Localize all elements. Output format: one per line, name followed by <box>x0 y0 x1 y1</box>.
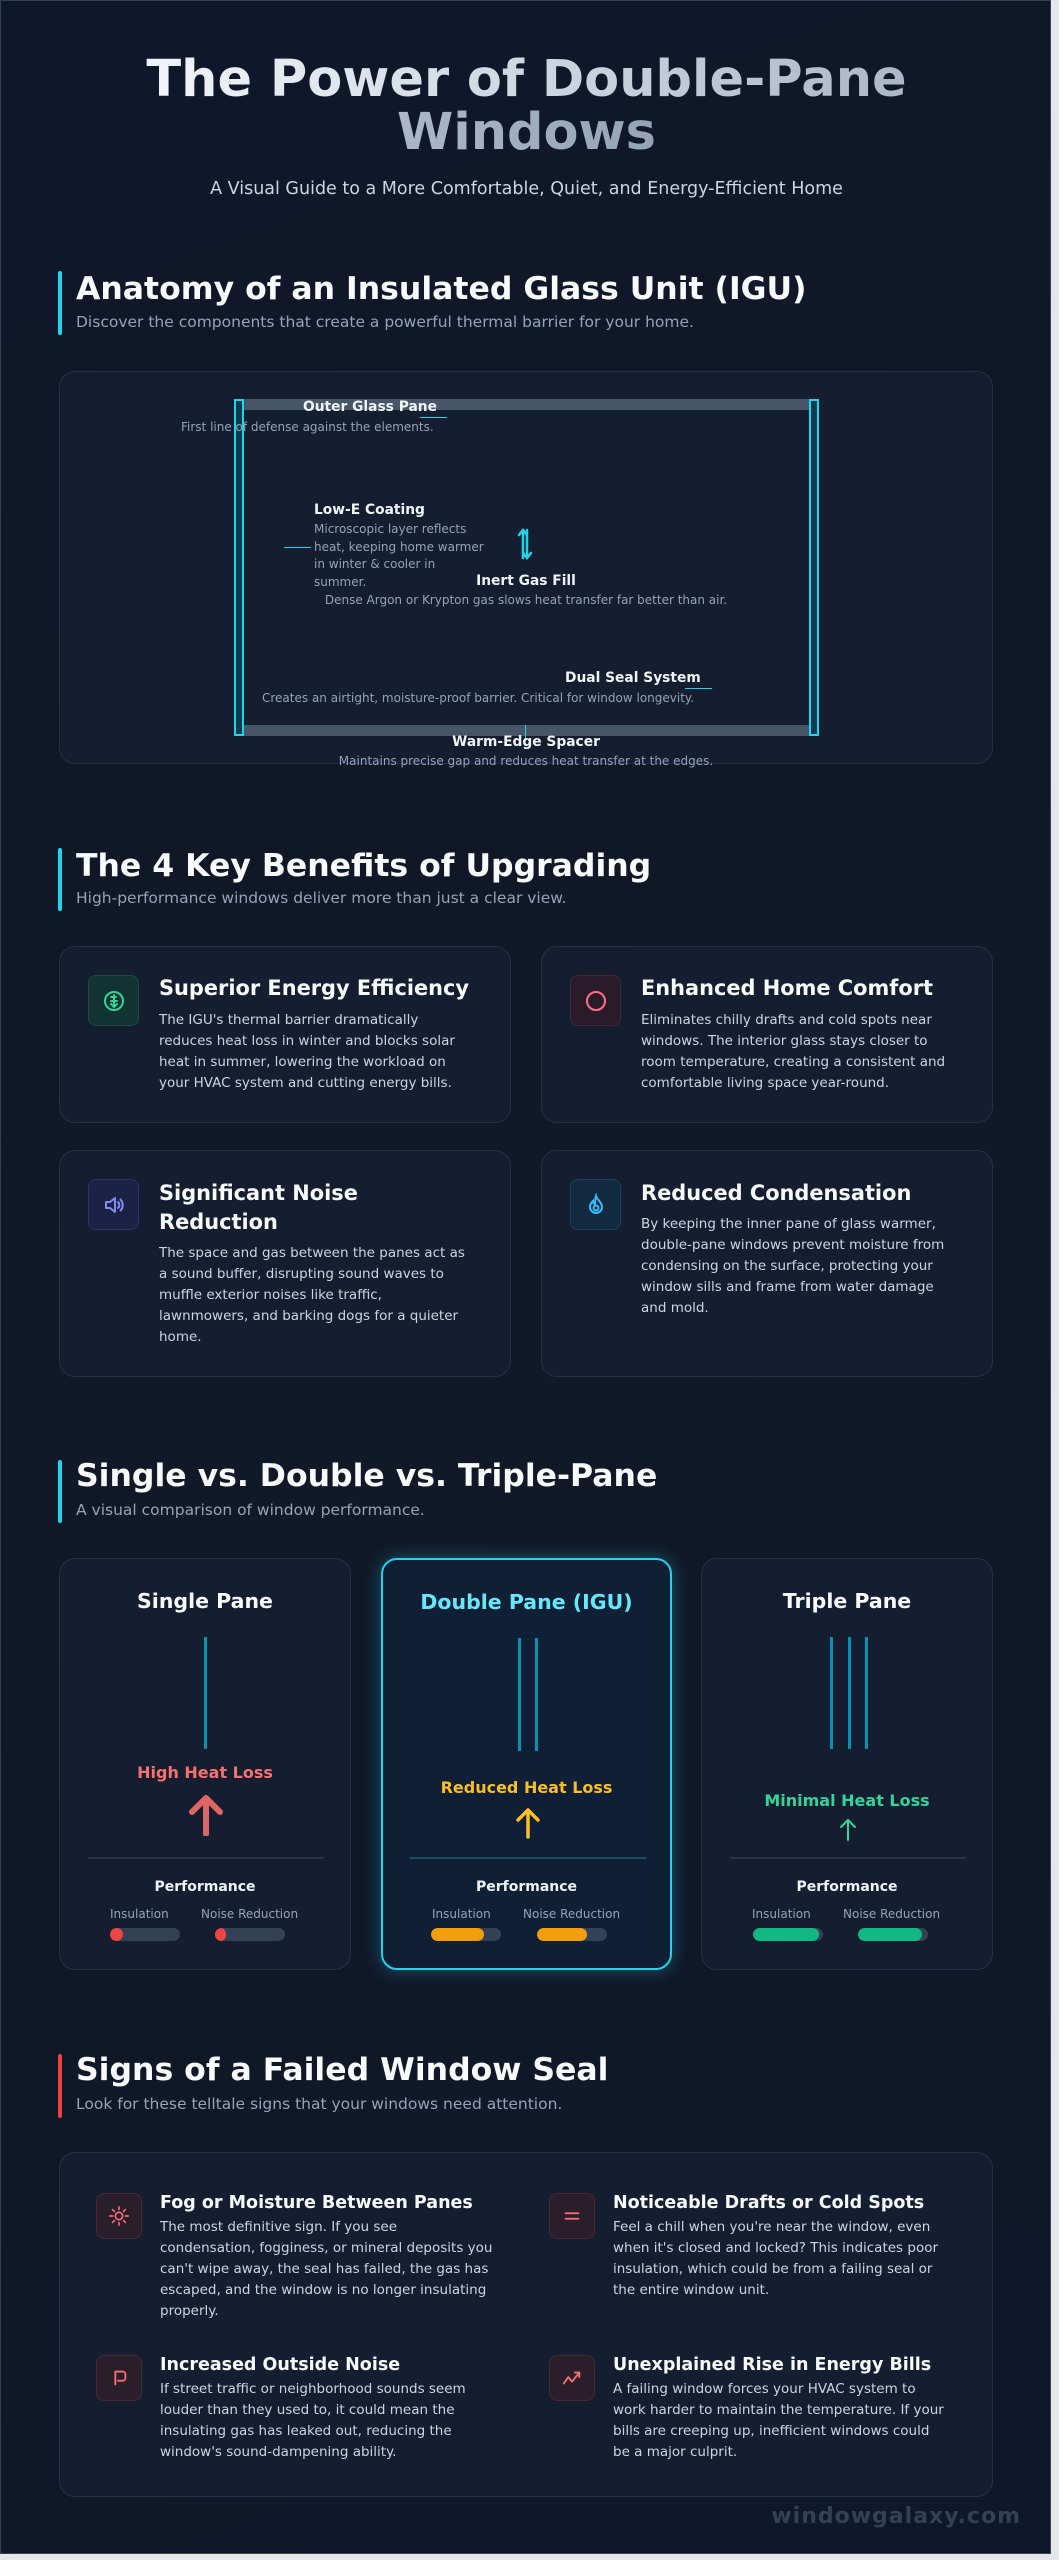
label: inert gas fill: Dense Argon or Krypton gas slows heat transfer far better than air. <box>325 593 727 607</box>
section header: comparison <box>58 1458 657 1523</box>
sign: fog: properly. <box>160 2303 219 2319</box>
card: double pane: Noise Reduction <box>523 1907 620 1921</box>
sign: noise: window's sound-dampening ability. <box>160 2444 396 2460</box>
section header: failed seal <box>58 2052 608 2118</box>
sign: drafts: insulation, which could be from a failing seal or <box>613 2261 932 2277</box>
card: noise reduction <box>59 1150 511 1377</box>
card: home comfort: Enhanced Home Comfort <box>641 976 933 1000</box>
card: home comfort: comfortable living space year-round. <box>641 1075 889 1091</box>
card: double pane: Reduced Heat Loss <box>441 1778 612 1797</box>
card: triple pane: Performance <box>796 1879 898 1895</box>
section header: failed seal: Look for these telltale signs that your windows need attention. <box>76 2095 562 2113</box>
card: noise reduction: home. <box>159 1329 202 1345</box>
label: warm-edge spacer: Warm-Edge Spacer <box>452 734 600 750</box>
card: triple pane <box>701 1558 993 1970</box>
sign: fog <box>96 2193 492 2319</box>
card: noise reduction: muffle exterior noises like traffic, <box>159 1287 382 1303</box>
card: triple pane: Minimal Heat Loss <box>764 1791 930 1810</box>
sign: noise: Increased Outside Noise <box>160 2355 400 2375</box>
panel: signs <box>59 2152 993 2497</box>
card: triple pane: Triple Pane <box>783 1589 911 1613</box>
card: home comfort: Eliminates chilly drafts and cold spots near <box>641 1012 932 1028</box>
section header: anatomy <box>58 271 806 335</box>
card: single pane: High Heat Loss <box>137 1763 273 1782</box>
sign: fog: The most definitive sign. If you see <box>160 2219 397 2235</box>
sign: energy bills: bills are creeping up, inefficient windows could <box>613 2423 929 2439</box>
label: dual seal system: Dual Seal System <box>565 670 701 686</box>
panel: IGU diagram <box>59 371 993 764</box>
section header: benefits: The 4 Key Benefits of Upgrading <box>76 848 651 884</box>
label: low-e coating: summer. <box>314 574 366 588</box>
section header: comparison: A visual comparison of window performance. <box>76 1501 425 1519</box>
label: dual seal system: Creates an airtight, moisture-proof barrier. Critical for window longevity. <box>262 691 694 705</box>
label: low-e coating <box>284 502 484 588</box>
sign: energy bills: work harder to maintain the temperature. If your <box>613 2402 944 2418</box>
sign: energy bills: be a major culprit. <box>613 2444 737 2460</box>
card: energy efficiency: Superior Energy Efficiency <box>159 976 469 1000</box>
sign: energy bills: Unexplained Rise in Energy Bills <box>613 2355 931 2375</box>
section header: comparison: Single vs. Double vs. Triple-Pane <box>76 1458 657 1494</box>
card: noise reduction: The space and gas between the panes act as <box>159 1245 465 1261</box>
sign: energy bills <box>549 2355 944 2460</box>
card: triple pane: Noise Reduction <box>843 1907 940 1921</box>
icon: arrow <box>516 1808 540 1839</box>
label: inert gas fill <box>325 573 727 607</box>
card: triple pane: Insulation <box>752 1907 811 1921</box>
card: energy efficiency: your HVAC system and cutting energy bills. <box>159 1075 452 1091</box>
watermark: windowgalaxy.com <box>771 2504 1021 2529</box>
title <box>146 50 907 162</box>
card: home comfort: room temperature, creating a consistent and <box>641 1054 945 1070</box>
card: condensation: Reduced Condensation <box>641 1181 911 1205</box>
card: energy efficiency <box>59 946 511 1123</box>
title: The Power of Double-Pane <box>146 50 907 109</box>
card: energy efficiency: The IGU's thermal barrier dramatically <box>159 1012 418 1028</box>
sign: drafts: when it's closed and locked? This indicates poor <box>613 2240 938 2256</box>
card: condensation: and mold. <box>641 1300 709 1316</box>
section header: anatomy: Discover the components that create a powerful thermal barrier for your home. <box>76 313 694 331</box>
card: home comfort <box>541 946 993 1123</box>
sign: fog: can't wipe away, the seal has failed, the gas has <box>160 2261 488 2277</box>
label: low-e coating: Low-E Coating <box>314 502 425 518</box>
label: outer glass pane: First line of defense against the elements. <box>181 420 434 434</box>
card: noise reduction: Reduction <box>159 1210 278 1234</box>
card: single pane: Noise Reduction <box>201 1907 298 1921</box>
sign: fog: escaped, and the window is no longer insulating <box>160 2282 486 2298</box>
card: single pane <box>59 1558 351 1970</box>
sign: noise <box>96 2355 466 2460</box>
card: double pane: Insulation <box>432 1907 491 1921</box>
label: low-e coating: heat, keeping home warmer <box>314 540 484 554</box>
icon: gas arrows <box>518 528 532 560</box>
sign: energy bills: A failing window forces your HVAC system to <box>613 2381 916 2397</box>
icon: speaker <box>88 1179 139 1230</box>
subtitle: A Visual Guide to a More Comfortable, Quiet, and Energy-Efficient Home <box>210 179 843 199</box>
card: noise reduction: lawnmowers, and barking dogs for a quieter <box>159 1308 458 1324</box>
sign: noise: If street traffic or neighborhood sounds seem <box>160 2381 466 2397</box>
label: low-e coating: in winter & cooler in <box>314 557 435 571</box>
sign: fog: condensation, fogginess, or mineral deposits you <box>160 2240 492 2256</box>
section header: benefits <box>58 848 651 911</box>
label: dual seal system <box>262 670 712 705</box>
section header: failed seal: Signs of a Failed Window Seal <box>76 2052 608 2088</box>
icon: leaf coin <box>88 975 139 1026</box>
label: outer glass pane: Outer Glass Pane <box>303 399 437 415</box>
card: condensation: double-pane windows prevent moisture from <box>641 1237 944 1253</box>
card: single pane: Performance <box>154 1879 256 1895</box>
icon: ring <box>570 975 621 1026</box>
sign: noise: louder than they used to, it could mean the <box>160 2402 454 2418</box>
section header: benefits: High-performance windows deliver more than just a clear view. <box>76 889 566 907</box>
panes <box>518 1638 521 1751</box>
icon: small arrow <box>840 1818 856 1841</box>
label: inert gas fill: Inert Gas Fill <box>476 573 576 589</box>
card: energy efficiency: heat in summer, lowering the workload on <box>159 1054 446 1070</box>
sign: noise: insulating gas has leaked out, reducing the <box>160 2423 452 2439</box>
panes <box>830 1637 833 1749</box>
label: warm-edge spacer <box>339 725 713 768</box>
card: noise reduction: Significant Noise <box>159 1181 358 1205</box>
label: low-e coating: Microscopic layer reflects <box>314 522 466 536</box>
card: single pane: Insulation <box>110 1907 169 1921</box>
sign: drafts: the entire window unit. <box>613 2282 769 2298</box>
section header: anatomy: Anatomy of an Insulated Glass Unit (IGU) <box>76 271 806 307</box>
icon: drop <box>570 1179 621 1230</box>
card: double pane: Double Pane (IGU) <box>420 1590 633 1614</box>
sign: drafts: Feel a chill when you're near the window, even <box>613 2219 930 2235</box>
title: Windows <box>397 103 656 162</box>
card: double pane: Performance <box>476 1879 577 1895</box>
card: condensation: By keeping the inner pane of glass warmer, <box>641 1216 936 1232</box>
sign: fog: Fog or Moisture Between Panes <box>160 2193 473 2213</box>
card: condensation: condensing on the surface, protecting your <box>641 1258 933 1274</box>
card: home comfort: windows. The interior glass stays closer to <box>641 1033 928 1049</box>
diagram: window unit <box>234 399 819 736</box>
card: condensation: window sills and frame from water damage <box>641 1279 934 1295</box>
panes <box>204 1637 207 1749</box>
card: noise reduction: a sound buffer, disrupting sound waves to <box>159 1266 444 1282</box>
card: energy efficiency: reduces heat loss in winter and blocks solar <box>159 1033 455 1049</box>
card: double pane <box>381 1558 672 1970</box>
sign: drafts <box>549 2193 938 2298</box>
card: single pane: Single Pane <box>137 1589 273 1613</box>
sign: drafts: Noticeable Drafts or Cold Spots <box>613 2193 924 2213</box>
icon: big arrow <box>189 1795 223 1836</box>
label: outer glass pane <box>181 399 447 434</box>
card: condensation <box>541 1150 993 1377</box>
label: warm-edge spacer: Maintains precise gap and reduces heat transfer at the edges. <box>339 754 713 768</box>
